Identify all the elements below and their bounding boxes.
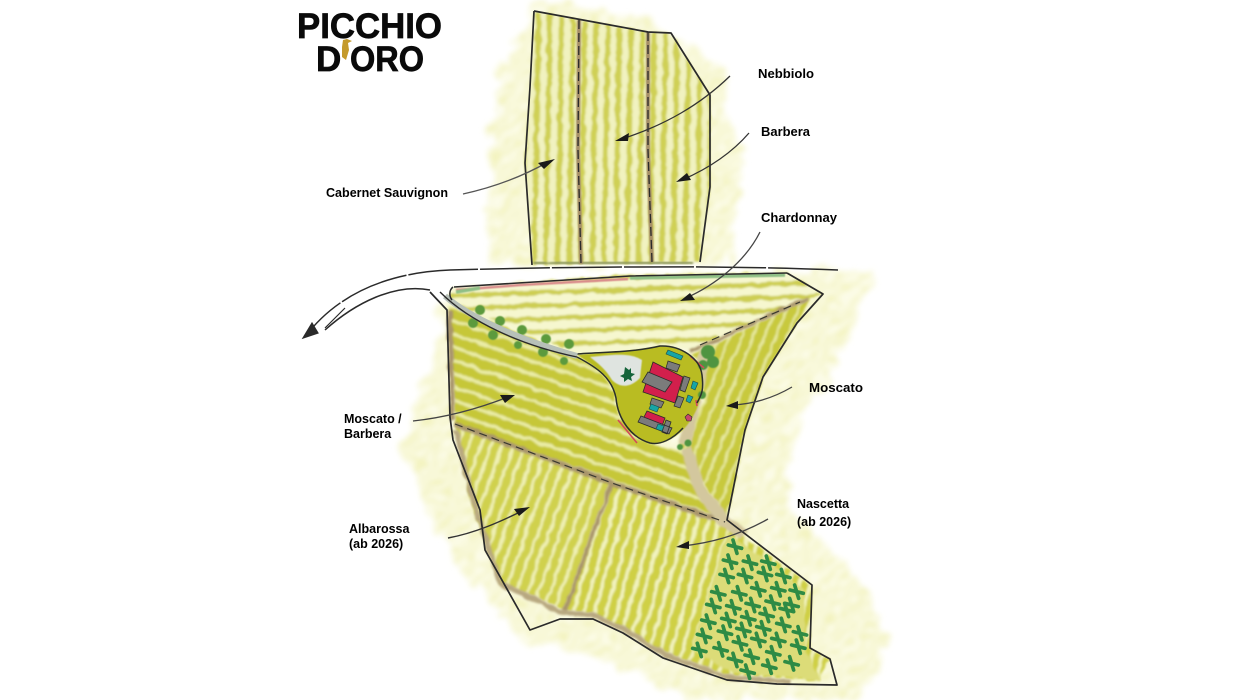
brown field paths — [450, 298, 808, 682]
label: Albarossa: (ab 2026) — [349, 537, 403, 551]
pale planted block under Nascetta vines — [692, 532, 820, 680]
road and driveway — [303, 267, 838, 357]
field: Nascetta — [565, 483, 830, 680]
field: Albarossa — [456, 426, 612, 610]
field: Chardonnay — [447, 273, 823, 353]
label: Moscato / Barbera: Barbera — [344, 427, 392, 441]
label: Nascetta: (ab 2026) — [797, 515, 851, 529]
logo — [297, 7, 442, 79]
dark dashed field divider lines — [455, 302, 800, 522]
field: Moscato — [680, 298, 810, 520]
label: Moscato / Barbera: Moscato / — [344, 412, 402, 426]
field: Cabernet, Nebbiolo, Barbera — [525, 11, 710, 265]
farmstead grounds — [577, 345, 719, 450]
arrow: Cabernet Sauvignon — [463, 159, 555, 194]
arrow: Nebbiolo — [615, 76, 730, 141]
logo: ORO — [350, 40, 424, 79]
icon: woodpecker — [342, 39, 352, 60]
label: Nebbiolo: Nebbiolo — [758, 67, 814, 81]
arrow: Moscato — [726, 387, 792, 409]
teal outbuildings — [649, 350, 698, 431]
label: Barbera: Barbera — [761, 125, 811, 139]
label: Chardonnay: Chardonnay — [761, 211, 837, 225]
logo: D — [316, 40, 341, 79]
arrow: Chardonnay — [680, 232, 760, 301]
garden shrubs — [677, 345, 719, 450]
arrow: Nascetta — [676, 519, 768, 549]
vines on Nascetta — [693, 540, 807, 678]
property outlines — [430, 11, 837, 685]
coloured pencil halo — [400, 0, 890, 700]
arrow: Moscato / Barbera — [413, 395, 515, 421]
grounds outline and driveway — [577, 346, 703, 443]
label: Moscato: Moscato — [809, 381, 863, 395]
logo: PICCHIO — [297, 7, 442, 46]
hedge along Chardonnay edge — [456, 275, 785, 292]
secondary building — [643, 411, 665, 426]
arrow: Barbera — [676, 133, 749, 182]
label: Albarossa: Albarossa — [349, 522, 409, 536]
field: Moscato / Barbera — [449, 305, 725, 520]
label: Nascetta: Nascetta — [797, 497, 849, 511]
arrow: Albarossa — [448, 507, 530, 538]
label: Cabernet Sauvignon: Cabernet Sauvignon — [326, 186, 448, 200]
main building — [643, 362, 683, 403]
logo: ’ — [341, 46, 345, 62]
hedge shrubs along driveway — [468, 305, 574, 365]
icon: tree — [620, 367, 635, 382]
